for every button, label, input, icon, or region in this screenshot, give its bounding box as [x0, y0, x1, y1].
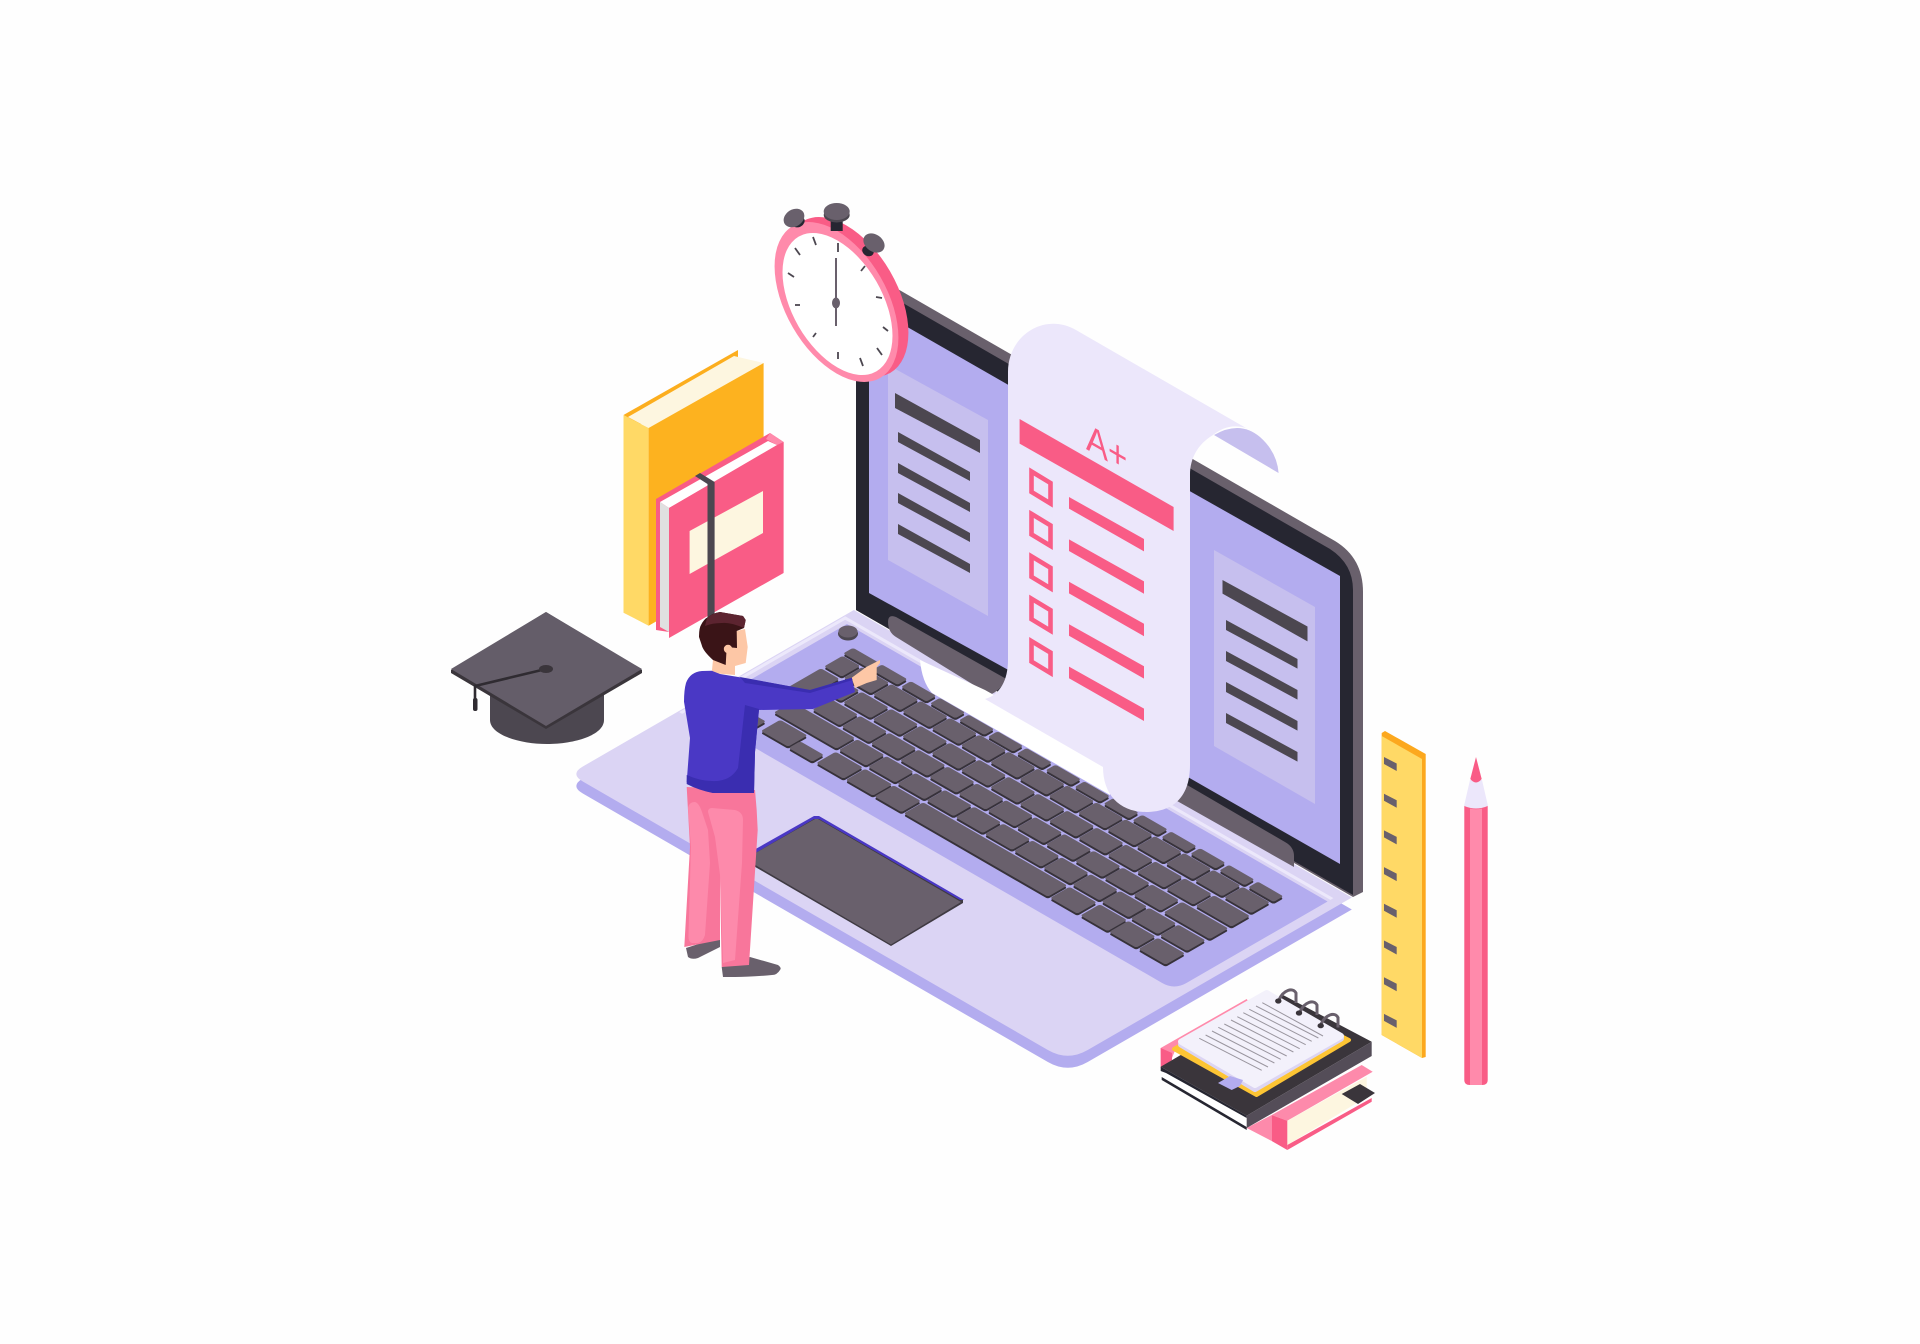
panel: exam paper: [985, 324, 1279, 812]
clock ticks: [788, 237, 888, 366]
dark notebook: [1161, 995, 1372, 1130]
icon: yellow book: [624, 350, 764, 626]
notepad rings: [1275, 990, 1338, 1028]
icon: stack of books with notepad: [1161, 990, 1375, 1150]
clock hand: [832, 258, 840, 326]
crowns: [780, 203, 888, 258]
answer lines: [1069, 497, 1144, 721]
power button: [838, 626, 858, 640]
icon: pink book with strap: [656, 433, 784, 638]
panel: laptop screen: [856, 265, 1363, 897]
paper underside strip: [920, 660, 1110, 795]
icon: ruler: [1382, 731, 1426, 1058]
right screen area: [1186, 489, 1340, 864]
trousers: [684, 787, 758, 967]
shoes: [686, 927, 781, 977]
hand: [852, 660, 880, 688]
sweater shade: [687, 705, 759, 793]
paper curl: [1214, 428, 1279, 473]
keyboard recess: [681, 618, 1332, 994]
left hinge: [888, 616, 1010, 695]
header bar: [1020, 419, 1174, 531]
right document: [1214, 550, 1315, 804]
lower pink book: [1161, 999, 1375, 1150]
notepad lines: [1199, 1003, 1323, 1070]
notepad page: [1181, 993, 1341, 1085]
panel: laptop base: [570, 610, 1352, 1074]
keyboard: [735, 648, 1283, 967]
right hinge: [1170, 775, 1294, 867]
checklist boxes: [1032, 472, 1050, 673]
icon: pencil: [1464, 757, 1488, 1085]
trouser highlights: [688, 802, 743, 963]
hair: [699, 612, 746, 665]
left screen area: [869, 305, 1012, 672]
icon: stopwatch: [775, 190, 908, 409]
left document: [888, 365, 988, 616]
grade: A+: A+: [1086, 416, 1127, 482]
ear: [724, 645, 732, 653]
yellow sheet: [1174, 997, 1349, 1095]
paper sheet: [985, 324, 1246, 812]
neck and face: [712, 629, 748, 675]
hair highlight: [705, 612, 746, 628]
sweater arm shade: [740, 677, 852, 693]
notepad page shadow: [1181, 994, 1341, 1089]
touchpad: [745, 816, 964, 946]
icon: graduation cap: [451, 612, 642, 744]
sweater: [684, 671, 855, 793]
figure: student: [684, 612, 880, 977]
lavender bookmark: [1218, 1076, 1243, 1090]
